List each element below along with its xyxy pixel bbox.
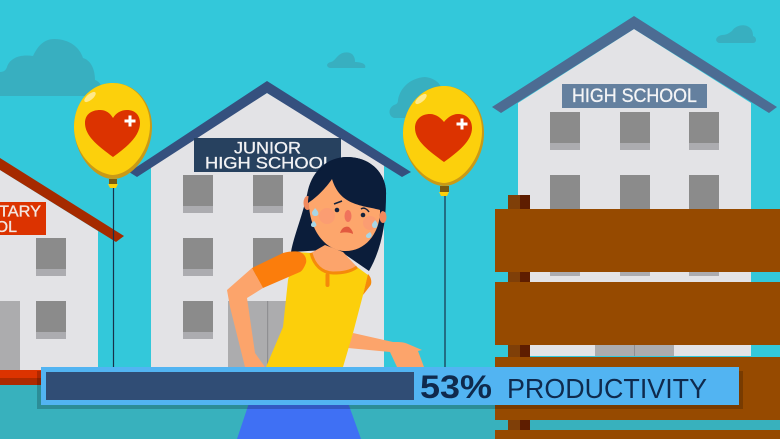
- tears: [311, 208, 378, 238]
- progress bar: [37, 367, 743, 409]
- elementary windows: [36, 238, 66, 339]
- elementary sign: TARY: [0, 204, 41, 220]
- right balloon heart: [415, 114, 472, 162]
- left balloon body: [74, 83, 152, 179]
- ear right: [380, 211, 386, 223]
- blush right: [363, 216, 377, 230]
- junior high windows: [183, 175, 283, 339]
- bar background: [41, 367, 739, 405]
- junior high door: [228, 301, 306, 367]
- eyes: [335, 208, 365, 217]
- high school sign: HIGH SCHOOL: [572, 86, 697, 107]
- nose: [344, 210, 352, 222]
- junior high wall: [151, 93, 384, 367]
- elementary roof: [0, 158, 124, 242]
- high school roof: [492, 16, 777, 113]
- face: [309, 172, 380, 251]
- junior high sign: JUNIOR: [234, 140, 301, 158]
- ear left: [304, 196, 312, 210]
- placket: [326, 273, 330, 287]
- skirt: [237, 400, 361, 439]
- right balloon knot: [439, 186, 449, 196]
- left balloon knot: [108, 179, 118, 188]
- elementary sign: [0, 202, 46, 236]
- junior high roof: [129, 81, 411, 177]
- high school wall: [518, 29, 751, 356]
- left balloon plus: [124, 116, 136, 126]
- fence: [495, 195, 780, 439]
- yellow top: [266, 252, 368, 367]
- right balloon plus: [456, 118, 468, 130]
- percentage: 53%: [420, 369, 492, 405]
- mouth: [340, 227, 353, 234]
- girl: [227, 157, 424, 439]
- left balloon heart: [85, 110, 140, 157]
- elementary wall: [0, 170, 98, 370]
- eyebrows: [334, 201, 369, 212]
- blush left: [319, 208, 335, 224]
- cloud: behind right balloon: [390, 77, 442, 118]
- building: junior high school: [129, 81, 411, 367]
- high school windows: [550, 112, 719, 276]
- left arm: [227, 268, 265, 367]
- right balloon string: [444, 194, 446, 368]
- balloon: right: [403, 86, 484, 368]
- building: elementary school: [0, 158, 124, 385]
- collar: [311, 253, 357, 273]
- right sleeve: [363, 274, 371, 295]
- left balloon string: [112, 186, 114, 368]
- cloud: small middle: [327, 52, 365, 68]
- junior high sign: [194, 138, 341, 172]
- fringe: [308, 157, 386, 212]
- back hair: [291, 157, 386, 271]
- right balloon body: [403, 86, 484, 186]
- right arm: [348, 333, 424, 367]
- fence boards: [495, 209, 780, 439]
- bar shadow: [37, 371, 743, 409]
- ground: [0, 385, 780, 439]
- balloon: left: [74, 83, 152, 368]
- junior high sign: HIGH SCHOOL: [205, 154, 333, 172]
- neck: [311, 245, 357, 273]
- left sleeve: [252, 251, 306, 288]
- cloud: small top right: [716, 25, 756, 43]
- label: PRODUCTIVITY: [507, 373, 707, 404]
- high school door: [595, 340, 674, 356]
- elementary door: [0, 301, 20, 370]
- fence post: [508, 195, 530, 439]
- building: high school: [492, 16, 777, 356]
- elementary base: [0, 370, 42, 385]
- cloud: large left: [0, 39, 102, 96]
- bar fill: [46, 372, 414, 400]
